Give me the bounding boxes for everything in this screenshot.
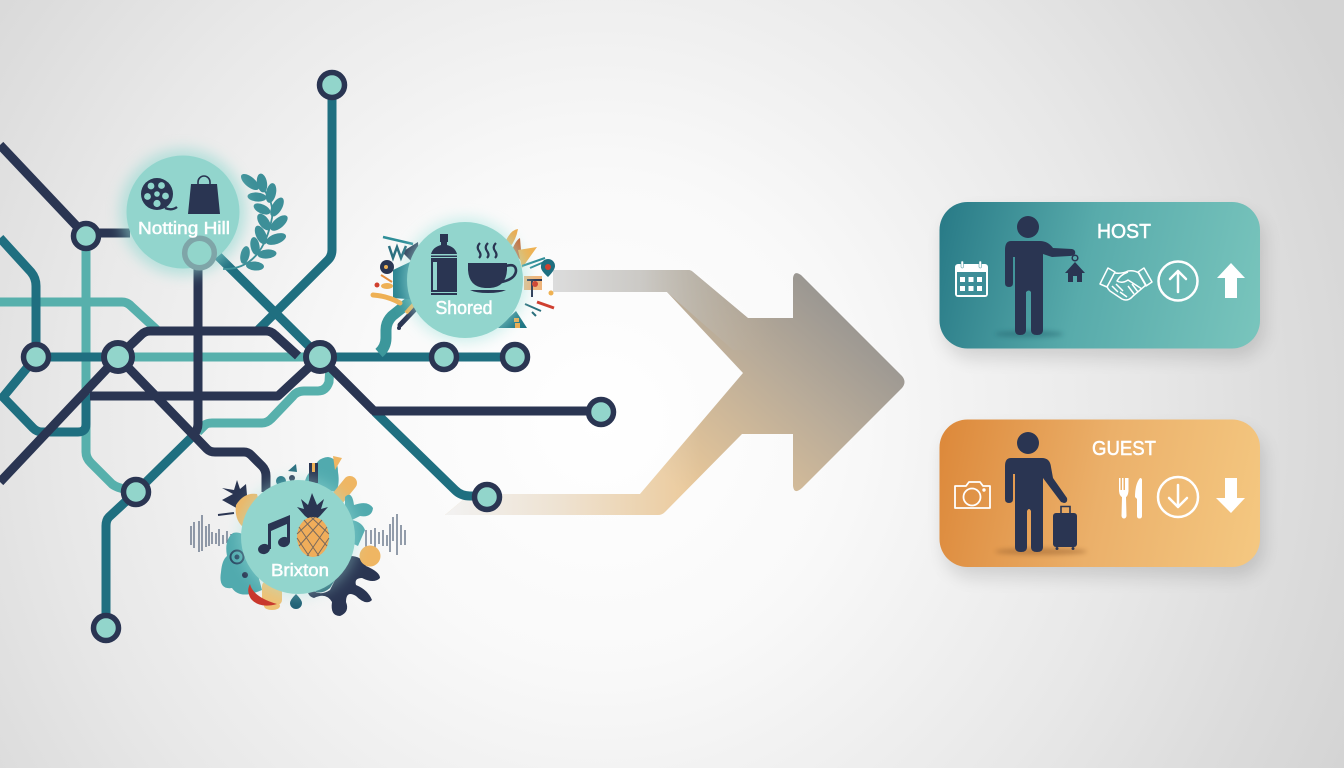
sound waves left <box>191 515 236 552</box>
icon: down circle <box>1158 477 1198 517</box>
figure shadow <box>995 548 1087 555</box>
merging arrow <box>445 270 904 515</box>
cluster: Shored decorations <box>373 229 555 330</box>
icon: pineapple <box>297 493 329 557</box>
icon: host figure with key <box>1005 216 1085 335</box>
icon: camera <box>955 482 990 508</box>
metro stations <box>24 72 614 640</box>
icon: down arrow <box>1216 478 1245 513</box>
icon: up circle <box>1158 262 1198 300</box>
sound waves right <box>366 514 405 555</box>
notting hill laurel <box>223 171 290 271</box>
icon: calendar <box>955 261 988 297</box>
dark teal lines <box>0 85 515 628</box>
icon: up arrow <box>1217 263 1245 298</box>
icon: shopping bag <box>188 176 220 214</box>
metro network lines <box>0 85 600 628</box>
icon: fork and knife <box>1119 478 1142 518</box>
cluster: Brixton decorations <box>191 456 405 616</box>
station: Brixton <box>238 477 358 597</box>
icon: spray can <box>431 234 457 295</box>
station: Notting Hill <box>120 149 246 275</box>
label: Brixton: Brixton <box>271 560 329 580</box>
icon: film reel <box>141 178 177 210</box>
panel: guest <box>940 420 1260 567</box>
card shadows <box>944 212 1264 577</box>
icon: coffee cup <box>468 243 516 293</box>
icon: handshake <box>1100 268 1152 300</box>
icon: guest figure with suitcase <box>1005 432 1077 552</box>
station: Shored <box>403 218 527 342</box>
label: Notting Hill: Notting Hill <box>138 218 230 238</box>
icon: music notes <box>257 515 291 555</box>
line up to Shored <box>379 300 412 353</box>
label: HOST: HOST <box>1097 221 1151 243</box>
label: GUEST: GUEST <box>1092 438 1156 460</box>
light teal lines <box>0 236 330 491</box>
panel: host <box>940 202 1260 348</box>
navy lines <box>0 145 600 492</box>
label: Shored: Shored <box>436 298 492 318</box>
figure shadow <box>995 330 1063 338</box>
station ring on Notting Hill <box>185 238 214 268</box>
